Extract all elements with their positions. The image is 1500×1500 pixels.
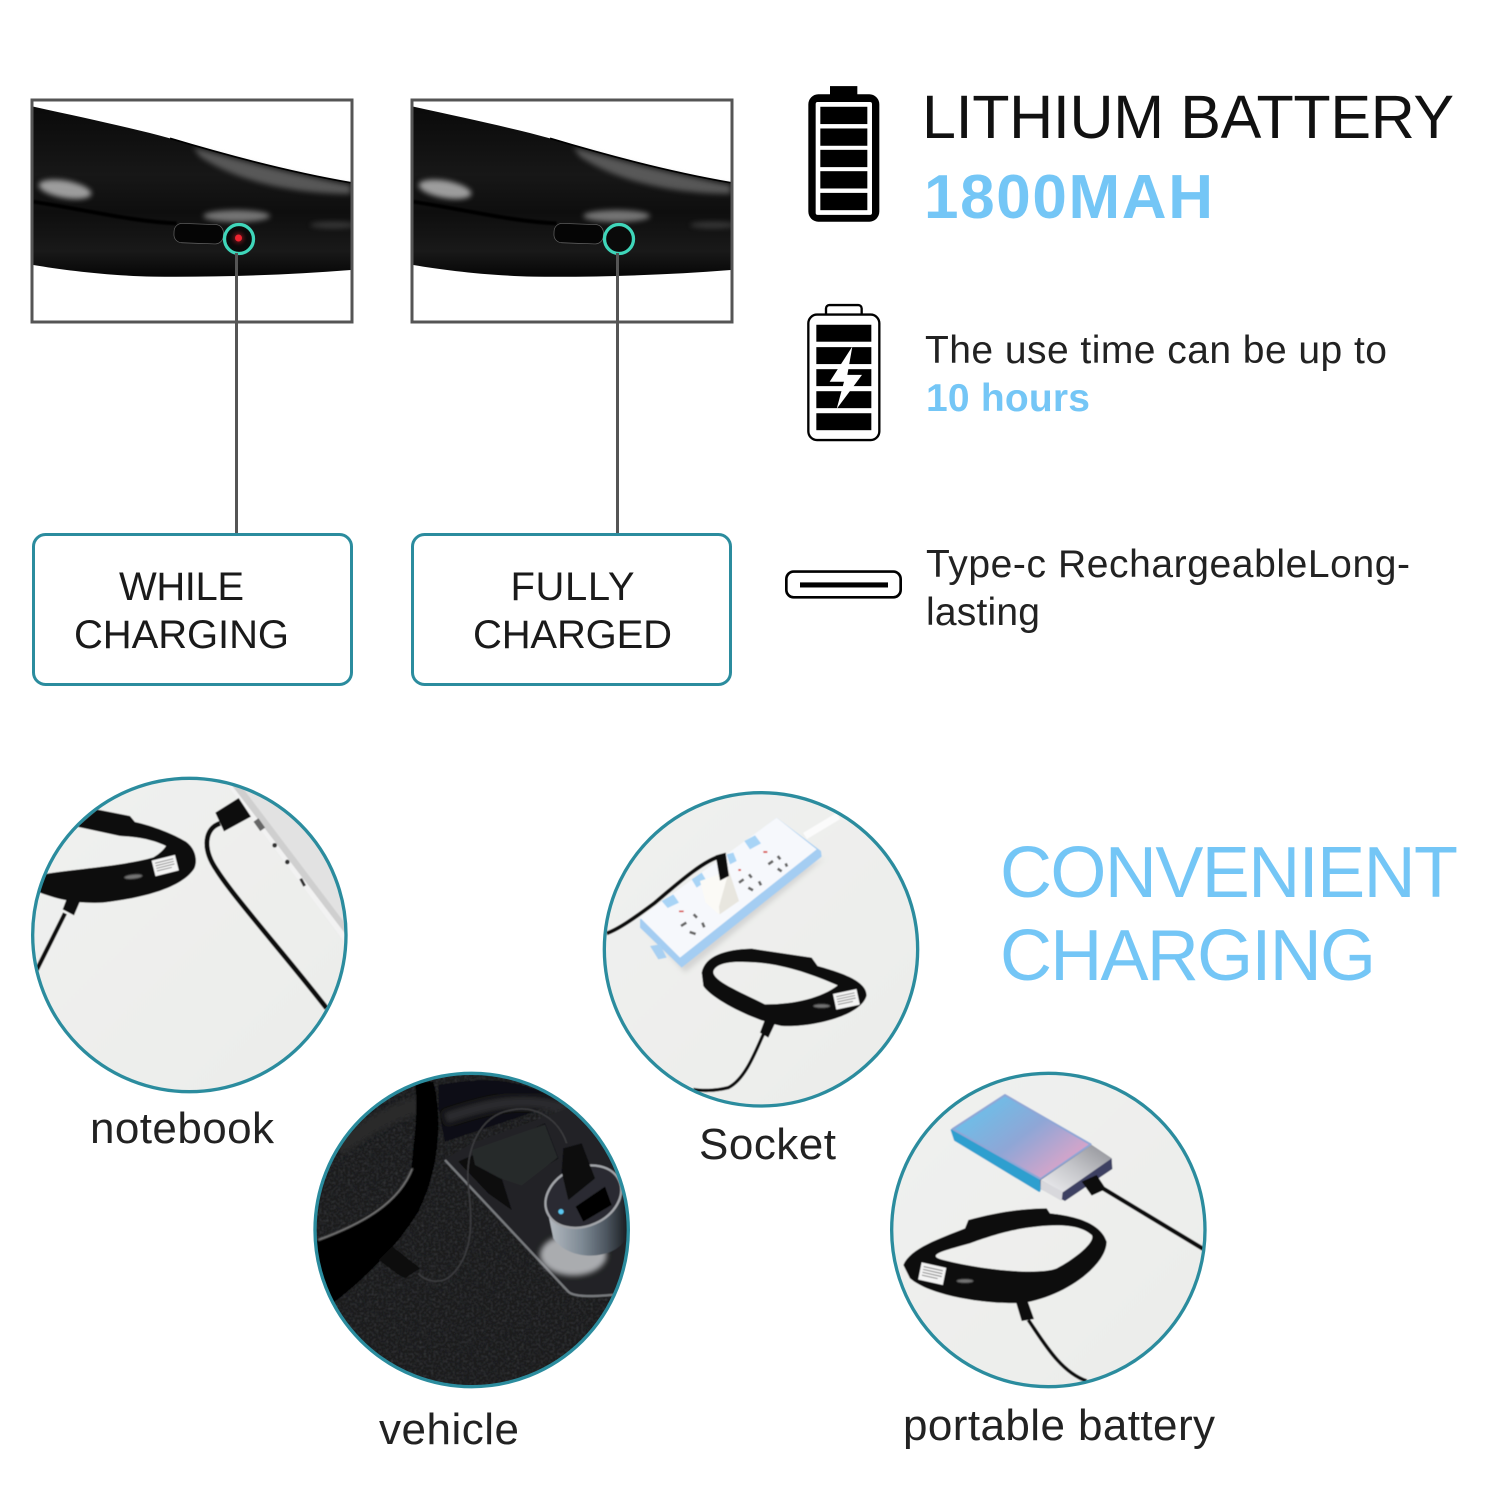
circle photo: socket <box>595 786 932 1116</box>
panel: while charging photo <box>32 100 357 322</box>
heading: lithium battery capacity <box>922 83 1454 232</box>
label box: fully charged: CHARGED <box>473 613 672 657</box>
indicator light off <box>604 224 634 254</box>
text: use time: 10 hours <box>926 377 1090 420</box>
icon: type-c port <box>786 572 901 597</box>
label box: while charging <box>34 534 352 684</box>
caption: notebook: notebook <box>90 1104 275 1153</box>
connector line: fully charged <box>616 253 619 534</box>
panel: fully charged photo <box>412 100 737 322</box>
icon: full battery <box>808 86 879 222</box>
caption: portable battery: portable battery <box>903 1401 1215 1450</box>
label box: fully charged: FULLY <box>510 565 634 609</box>
heading: lithium battery capacity: 1800MAH <box>924 163 1213 232</box>
circle photo: vehicle <box>305 1065 642 1395</box>
text: type-c rechargeable <box>926 543 1410 634</box>
label box: fully charged <box>412 534 730 684</box>
text: use time <box>925 329 1387 420</box>
text: type-c rechargeable: lasting <box>926 591 1040 634</box>
heading: convenient charging: CHARGING <box>1000 916 1376 996</box>
heading: lithium battery capacity: LITHIUM BATTERY <box>922 83 1454 151</box>
circle photo: notebook <box>31 776 348 1094</box>
connector line: while charging <box>235 253 238 534</box>
label box: while charging: WHILE <box>119 565 244 609</box>
caption: vehicle: vehicle <box>379 1405 519 1454</box>
icon: charging battery with bolt <box>808 305 879 440</box>
text: type-c rechargeable: Type-c RechargeableLong- <box>926 543 1410 586</box>
red charging indicator light <box>224 224 254 254</box>
caption: socket: Socket <box>699 1120 836 1169</box>
heading: convenient charging: CONVENIENT <box>1000 833 1458 913</box>
circle photo: portable battery <box>880 1065 1217 1395</box>
heading: convenient charging <box>1000 833 1458 996</box>
label box: while charging: CHARGING <box>74 613 289 657</box>
text: use time: The use time can be up to <box>925 329 1387 372</box>
